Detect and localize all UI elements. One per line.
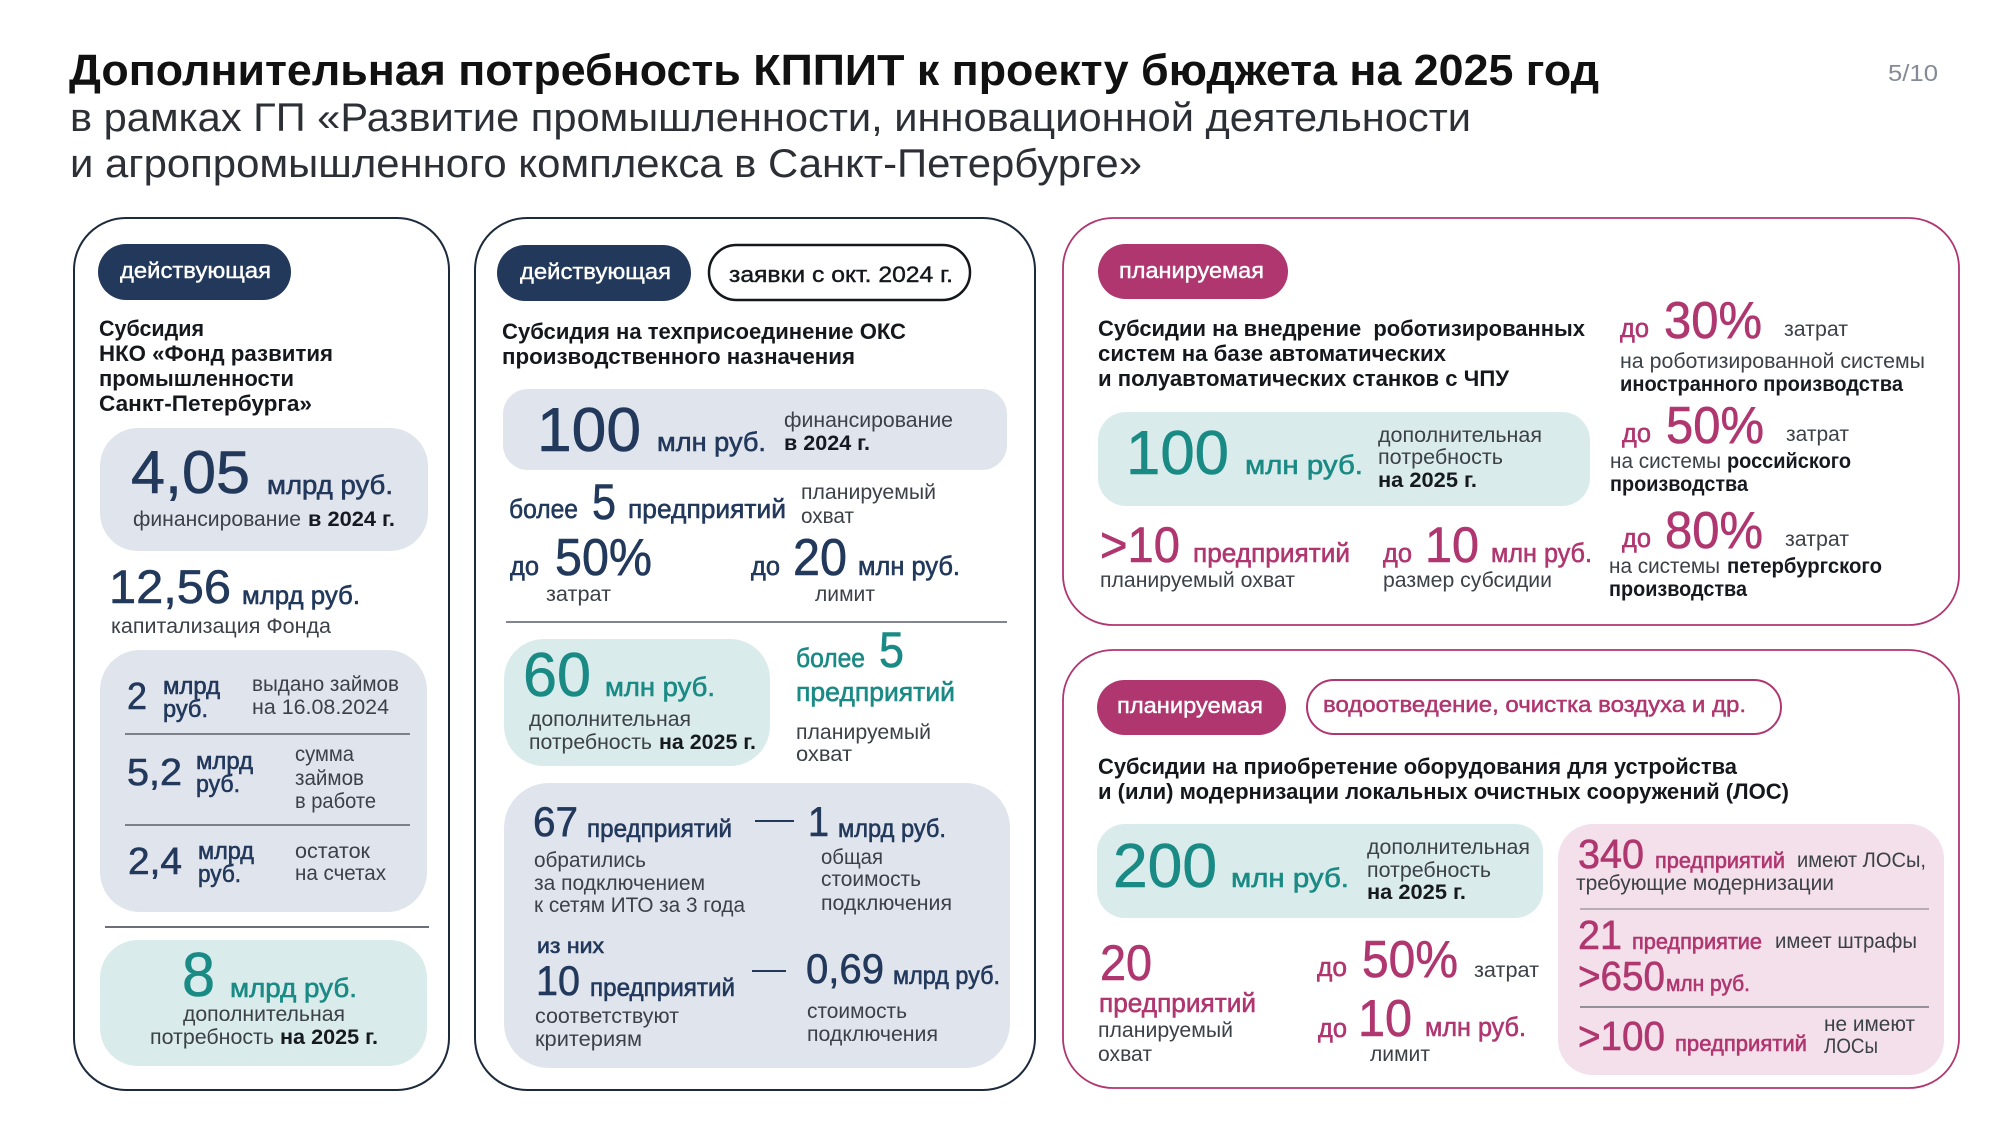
stat: up to 50 percent: затрат bbox=[546, 583, 611, 606]
stat: 50 percent russian: до bbox=[1622, 418, 1651, 448]
card: loans breakdown bbox=[100, 650, 427, 912]
card: enterprises with treatment facilities bbox=[1558, 824, 1944, 1075]
stat: 20 enterprises bbox=[1098, 935, 1256, 1066]
stat: 340 enterprises: имеют ЛОСы, bbox=[1797, 849, 1926, 872]
stat: 67 enterprises: обратились bbox=[534, 849, 646, 872]
panel: grid connection subsidy bbox=[475, 218, 1035, 1090]
stat: subsidy size up to 10 mln: 10 bbox=[1425, 517, 1479, 573]
stat: limit 20 mln: лимит bbox=[815, 583, 875, 606]
stat: 10 enterprises: предприятий bbox=[590, 974, 735, 1002]
stat: over 100 without treatment: предприятий bbox=[1675, 1031, 1807, 1056]
panel heading bbox=[99, 316, 333, 416]
stat: 80 percent petersburg: петербургского bbox=[1727, 555, 1882, 578]
stat: 340 enterprises: требующие модернизации bbox=[1576, 872, 1834, 895]
stat: limit up to 10 mln: до bbox=[1318, 1013, 1347, 1043]
stat: planned coverage: более bbox=[509, 494, 578, 524]
stat card: additional need 8 bn: на 2025 г. bbox=[280, 1026, 378, 1049]
stat: 80 percent petersburg: на системы bbox=[1609, 555, 1720, 578]
stat card: additional need 60 mln: дополнительная bbox=[529, 708, 691, 731]
stat: limit 20 mln: 20 bbox=[793, 529, 847, 587]
stat: loans issued: на 16.08.2024 bbox=[252, 696, 389, 719]
stat: loans issued: млрд bbox=[163, 673, 220, 700]
stat: 21 enterprises fined: предприятие bbox=[1632, 929, 1762, 954]
stat: over 10 enterprises: >10 bbox=[1100, 517, 1180, 573]
stat card: additional need 100 mln: на 2025 г. bbox=[1378, 469, 1477, 492]
status pill: planned: планируемая bbox=[1117, 693, 1263, 718]
stat: fund capitalization: млрд руб. bbox=[242, 580, 360, 610]
tag: scope: водоотведение, очистка воздуха и др. bbox=[1323, 692, 1746, 717]
panel heading: Субсидии на внедрение роботизированных bbox=[1098, 316, 1586, 341]
subtitle bbox=[70, 96, 1471, 186]
stat card: additional need 60 mln: 60 bbox=[523, 641, 591, 710]
stat: loans in work: сумма bbox=[295, 743, 354, 766]
stat: loans in work: руб. bbox=[196, 771, 240, 798]
stat card: financing 100 mln bbox=[503, 389, 1007, 470]
stat: 67 enterprises: 67 bbox=[533, 798, 578, 845]
stat: limit 20 mln: млн руб. bbox=[858, 551, 960, 581]
page number: 5/10 bbox=[1888, 60, 1938, 86]
stat: 10 enterprises: соответствуют bbox=[535, 1005, 679, 1028]
stat: teal coverage: охват bbox=[796, 743, 852, 766]
stat card: additional need 60 mln: на 2025 г. bbox=[659, 731, 756, 754]
status pill: active: действующая bbox=[120, 258, 271, 283]
stat: subsidy size up to 10 mln bbox=[1383, 517, 1592, 592]
stat: 80 percent petersburg: до bbox=[1622, 523, 1651, 553]
stat card: financing 100 mln: в 2024 г. bbox=[784, 432, 870, 455]
stat: 50 percent russian: российского bbox=[1727, 450, 1851, 473]
stat card: additional need 60 mln: млн руб. bbox=[605, 672, 715, 702]
stat: loans in work: млрд bbox=[196, 748, 253, 775]
stat: 30 percent foreign: иностранного производства bbox=[1620, 373, 1903, 396]
stat: 80 percent petersburg bbox=[1609, 502, 1882, 601]
stat card: financing 2024: финансирование bbox=[133, 508, 301, 531]
stat: 21 enterprises fined bbox=[1578, 912, 1917, 999]
stat: planned coverage: планируемый bbox=[801, 481, 936, 504]
stat: account balance: руб. bbox=[198, 861, 241, 888]
stat: subsidy size up to 10 mln: млн руб. bbox=[1491, 538, 1592, 568]
stat: 30 percent foreign bbox=[1620, 292, 1925, 396]
stat card: additional need 8 bn bbox=[100, 940, 427, 1066]
stat: 30 percent foreign: 30% bbox=[1664, 292, 1762, 350]
stat: 1 bn cost: стоимость bbox=[821, 868, 921, 891]
stat: account balance: остаток bbox=[295, 840, 371, 863]
stat: over 100 without treatment: не имеют bbox=[1824, 1013, 1915, 1036]
stat: 30 percent foreign: на роботизированной системы bbox=[1620, 350, 1925, 373]
stat: teal coverage bbox=[796, 622, 955, 766]
stat: 80 percent petersburg: производства bbox=[1609, 578, 1747, 601]
stat: fund capitalization: капитализация Фонда bbox=[111, 615, 331, 638]
stat: 10 enterprises bbox=[535, 957, 735, 1051]
stat: 20 enterprises: предприятий bbox=[1099, 988, 1256, 1018]
stat: over 100 without treatment bbox=[1578, 1013, 1915, 1059]
stat: loans in work: 5,2 bbox=[127, 752, 182, 794]
stat: teal coverage: планируемый bbox=[796, 721, 931, 744]
stat card: additional need 8 bn: дополнительная bbox=[183, 1003, 345, 1026]
stat: 50 percent russian: производства bbox=[1610, 473, 1748, 496]
status pill: active bbox=[98, 244, 291, 300]
stat: 20 enterprises: планируемый bbox=[1098, 1019, 1233, 1042]
panel heading: систем на базе автоматических bbox=[1098, 341, 1447, 366]
stat: over 10 enterprises: планируемый охват bbox=[1100, 569, 1295, 592]
stat card: additional need 200 mln: млн руб. bbox=[1231, 863, 1349, 893]
stat: 1 bn cost bbox=[808, 798, 952, 915]
stat card: additional need 100 mln bbox=[1098, 412, 1590, 506]
stat: limit 20 mln bbox=[751, 529, 960, 606]
stat card: additional need 8 bn: потребность bbox=[150, 1026, 274, 1049]
stat card: additional need 200 mln: на 2025 г. bbox=[1367, 881, 1466, 904]
panel heading: и полуавтоматических станков с ЧПУ bbox=[1098, 366, 1509, 391]
panel heading bbox=[502, 319, 906, 369]
stat: 21 enterprises fined: млн руб. bbox=[1666, 971, 1750, 996]
stat card: additional need 200 mln bbox=[1097, 824, 1543, 918]
stat: 21 enterprises fined: имеет штрафы bbox=[1775, 930, 1917, 953]
stat: 10 enterprises: 10 bbox=[536, 957, 580, 1004]
arrow dash bbox=[755, 820, 794, 822]
stat: 67 enterprises: предприятий bbox=[587, 815, 732, 843]
stat: over 100 without treatment: >100 bbox=[1578, 1013, 1665, 1059]
stat: 20 enterprises: 20 bbox=[1100, 935, 1152, 991]
title: Дополнительная потребность КППИТ к проекту бюджета на 2025 год bbox=[69, 46, 1599, 95]
stat: account balance bbox=[128, 838, 386, 888]
stat: 20 enterprises: охват bbox=[1098, 1043, 1152, 1066]
stat: subsidy size up to 10 mln: размер субсидии bbox=[1383, 569, 1552, 592]
tag: applications from October 2024 bbox=[709, 245, 970, 300]
stat: 340 enterprises: предприятий bbox=[1655, 848, 1785, 873]
stat card: additional need 100 mln: дополнительная bbox=[1378, 424, 1542, 447]
stat card: additional need 100 mln: потребность bbox=[1378, 446, 1503, 469]
stat: 67 enterprises: за подключением bbox=[534, 872, 705, 895]
stat card: additional need 8 bn: млрд руб. bbox=[230, 973, 357, 1003]
stat: 0.69 bn cost bbox=[806, 945, 1000, 1046]
stat card: additional need 100 mln: млн руб. bbox=[1245, 450, 1363, 480]
stat: account balance: млрд bbox=[198, 838, 254, 865]
stat: planned coverage bbox=[509, 474, 936, 530]
stat: over 10 enterprises: предприятий bbox=[1193, 538, 1350, 568]
stat: limit up to 10 mln bbox=[1318, 990, 1526, 1066]
panel heading bbox=[1098, 754, 1789, 804]
stat: account balance: на счетах bbox=[295, 862, 386, 885]
stat card: additional need 200 mln: 200 bbox=[1113, 832, 1217, 901]
stat: planned coverage: охват bbox=[801, 505, 854, 528]
stat card: financing 100 mln: 100 bbox=[537, 396, 641, 465]
stat card: financing 100 mln: финансирование bbox=[784, 409, 953, 432]
stat: 30 percent foreign: до bbox=[1620, 313, 1649, 343]
stat: fund capitalization bbox=[109, 560, 360, 638]
stat: 0.69 bn cost: стоимость bbox=[807, 1000, 907, 1023]
panel heading: производственного назначения bbox=[502, 344, 855, 369]
stat: teal coverage: предприятий bbox=[796, 677, 955, 707]
stat: up to 50 percent: до bbox=[510, 551, 539, 581]
stat card: financing 2024: млрд руб. bbox=[267, 470, 393, 500]
label: of them: из них bbox=[537, 935, 605, 958]
stat: 80 percent petersburg: затрат bbox=[1785, 528, 1849, 551]
stat: 10 enterprises: критериям bbox=[535, 1028, 642, 1051]
stat: 67 enterprises: к сетям ИТО за 3 года bbox=[534, 894, 745, 917]
stat: over 10 enterprises bbox=[1100, 517, 1350, 592]
stat: loans in work: в работе bbox=[295, 790, 376, 813]
stat: limit up to 10 mln: лимит bbox=[1370, 1043, 1430, 1066]
stat: 0.69 bn cost: подключения bbox=[807, 1023, 938, 1046]
panel: treatment facilities subsidy bbox=[1063, 650, 1959, 1088]
stat: account balance: 2,4 bbox=[128, 841, 182, 883]
stat: 50 percent russian: 50% bbox=[1666, 397, 1764, 455]
stat card: additional need 200 mln: дополнительная bbox=[1367, 836, 1530, 859]
stat: over 100 without treatment: ЛОСы bbox=[1824, 1035, 1878, 1058]
stat: limit up to 10 mln: 10 bbox=[1358, 990, 1412, 1048]
stat: 1 bn cost: 1 bbox=[808, 798, 829, 845]
panel heading bbox=[1098, 316, 1586, 391]
stat: up to 50 percent: затрат bbox=[1474, 959, 1539, 982]
panel heading: НКО «Фонд развития bbox=[99, 341, 333, 366]
stat: limit up to 10 mln: млн руб. bbox=[1425, 1012, 1526, 1042]
stat: 0.69 bn cost: млрд руб. bbox=[893, 962, 1000, 990]
stat: planned coverage: 5 bbox=[592, 474, 616, 530]
stat card: additional need 8 bn: 8 bbox=[182, 941, 215, 1010]
stat card: additional need 60 mln bbox=[504, 639, 770, 766]
stat: limit 20 mln: до bbox=[751, 551, 780, 581]
stat: loans issued: 2 bbox=[127, 676, 147, 718]
stat: 50 percent russian bbox=[1610, 397, 1851, 496]
status pill: planned bbox=[1098, 244, 1288, 299]
stat: 21 enterprises fined: 21 bbox=[1578, 912, 1622, 958]
stat: loans in work bbox=[127, 743, 376, 813]
stat: fund capitalization: 12,56 bbox=[109, 560, 231, 613]
stat: loans issued bbox=[127, 673, 399, 723]
panel heading: Субсидии на приобретение оборудования для устройства bbox=[1098, 754, 1738, 779]
stat card: additional need 100 mln: 100 bbox=[1126, 419, 1229, 488]
panel heading: Субсидия bbox=[99, 316, 204, 341]
stat: planned coverage: предприятий bbox=[628, 494, 786, 524]
panel: robotic systems subsidy bbox=[1063, 218, 1959, 625]
stat: 67 enterprises bbox=[533, 798, 745, 917]
status pill: planned bbox=[1097, 680, 1286, 735]
stat: up to 50 percent: до bbox=[1317, 952, 1347, 982]
stat card: financing 2024: 4,05 bbox=[131, 439, 250, 506]
subtitle: и агропромышленного комплекса в Санкт-Петербурге» bbox=[70, 142, 1142, 186]
stat: 50 percent russian: затрат bbox=[1786, 423, 1849, 446]
stat card: financing 100 mln: млн руб. bbox=[657, 427, 766, 457]
panel heading: Санкт-Петербурга» bbox=[99, 391, 312, 416]
stat: 1 bn cost: млрд руб. bbox=[838, 815, 946, 843]
stat: 340 enterprises: 340 bbox=[1578, 831, 1644, 877]
stat: up to 50 percent bbox=[1317, 931, 1539, 989]
status pill: active: действующая bbox=[520, 259, 671, 284]
stat card: additional need 60 mln: потребность bbox=[529, 731, 652, 754]
stat: up to 50 percent: 50% bbox=[1362, 931, 1458, 989]
stat: subsidy size up to 10 mln: до bbox=[1383, 538, 1412, 568]
panel heading: промышленности bbox=[99, 366, 294, 391]
panel: fund subsidy bbox=[74, 218, 449, 1090]
card: connection statistics bbox=[504, 783, 1010, 1068]
stat: 21 enterprises fined: >650 bbox=[1578, 953, 1665, 999]
panel heading: и (или) модернизации локальных очистных сооружений (ЛОС) bbox=[1098, 779, 1789, 804]
stat: 50 percent russian: на системы bbox=[1610, 450, 1721, 473]
stat: up to 50 percent bbox=[510, 529, 652, 606]
stat: teal coverage: 5 bbox=[879, 622, 904, 678]
status pill: active bbox=[497, 245, 691, 301]
stat: teal coverage: более bbox=[796, 643, 865, 673]
stat: 30 percent foreign: затрат bbox=[1784, 318, 1848, 341]
panel heading: Субсидия на техприсоединение ОКС bbox=[502, 319, 906, 344]
stat: loans issued: выдано займов bbox=[252, 673, 399, 696]
arrow dash bbox=[752, 970, 786, 972]
stat card: financing 2024: в 2024 г. bbox=[308, 508, 395, 531]
stat card: financing 2024 bbox=[100, 428, 428, 551]
stat: 0.69 bn cost: 0,69 bbox=[806, 945, 884, 992]
tag: scope bbox=[1307, 680, 1781, 734]
stat: loans issued: руб. bbox=[163, 696, 208, 723]
stat: 340 enterprises bbox=[1576, 831, 1926, 895]
stat: 1 bn cost: общая bbox=[821, 846, 883, 869]
status pill: planned: планируемая bbox=[1119, 258, 1264, 283]
stat: up to 50 percent: 50% bbox=[555, 529, 652, 587]
stat: 1 bn cost: подключения bbox=[821, 892, 952, 915]
stat: loans in work: займов bbox=[295, 767, 364, 790]
subtitle: в рамках ГП «Развитие промышленности, инновационной деятельности bbox=[70, 96, 1471, 140]
stat: 80 percent petersburg: 80% bbox=[1665, 502, 1763, 560]
tag: applications from October 2024: заявки с окт. 2024 г. bbox=[729, 262, 953, 287]
stat card: additional need 200 mln: потребность bbox=[1367, 859, 1491, 882]
